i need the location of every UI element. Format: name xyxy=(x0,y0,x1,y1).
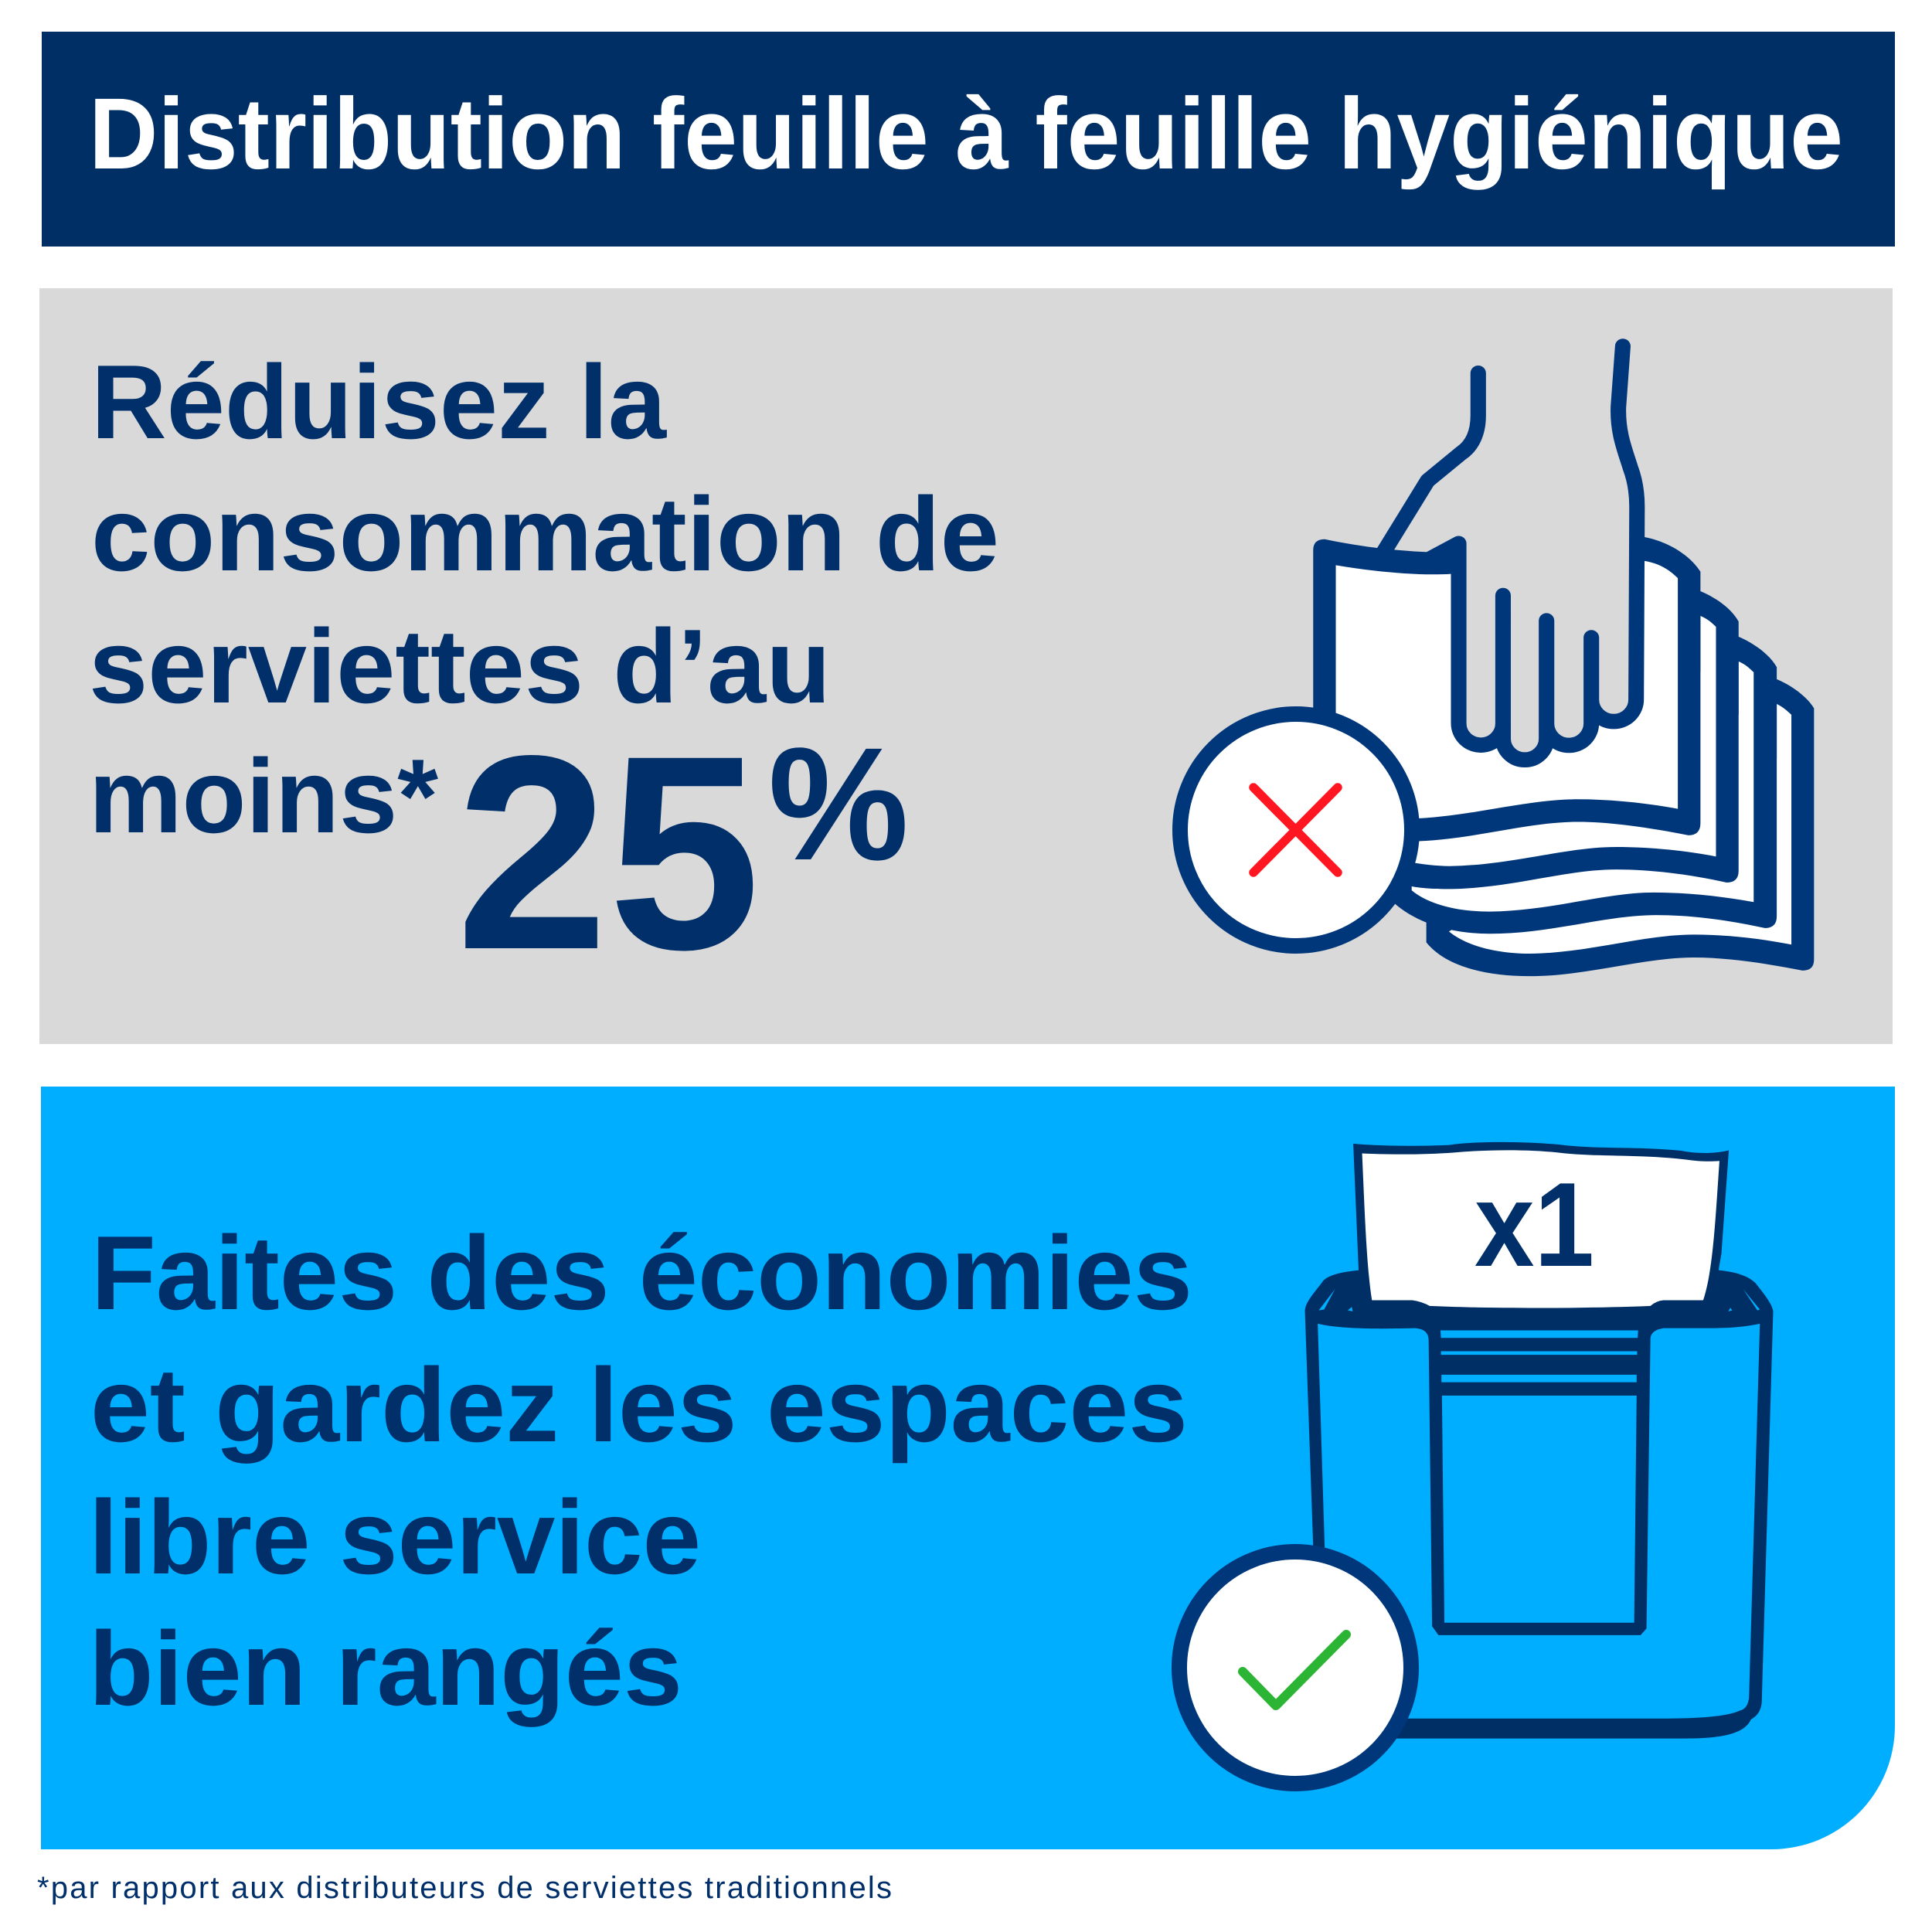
heading: savings: libre service xyxy=(89,1478,701,1596)
sheet 1 xyxy=(1313,537,1700,842)
sheet 3 xyxy=(1394,637,1777,934)
panel: reduce consumption xyxy=(39,288,1893,1044)
heading: reduce consumption: consommation de xyxy=(91,475,999,593)
figure: 25 percent: % xyxy=(768,715,909,894)
sheet 4 xyxy=(1427,679,1814,976)
heading: savings xyxy=(89,1214,1192,1727)
heading: reduce consumption: moins* xyxy=(89,737,438,855)
figure: 25 percent xyxy=(456,698,909,1007)
dispenser body xyxy=(1305,1270,1773,1739)
paper sheet xyxy=(1353,1142,1729,1308)
panel: savings and tidy spaces xyxy=(41,1087,1895,1849)
footnote: *par rapport aux distributeurs de serviettes traditionnels xyxy=(37,1871,892,1905)
icon: dispenser with one sheet xyxy=(1305,1142,1773,1739)
title: Distribution feuille à feuille hygiénique xyxy=(89,77,1843,190)
heading: savings: et gardez les espaces xyxy=(90,1346,1188,1464)
sheet 2 xyxy=(1406,591,1739,889)
figure: 25 percent: 25 xyxy=(456,698,760,1007)
icon: hand pulling paper sheets xyxy=(1313,346,1814,976)
heading: reduce consumption xyxy=(89,343,999,855)
heading: reduce consumption: serviettes d’au xyxy=(89,607,831,725)
hand xyxy=(1379,346,1637,760)
heading: savings: Faites des économies xyxy=(91,1214,1192,1332)
badge: green check xyxy=(1179,1552,1411,1784)
heading: savings: bien rangés xyxy=(89,1610,682,1727)
heading: reduce consumption: Réduisez la xyxy=(91,343,667,461)
badge: red cross xyxy=(1180,714,1412,946)
label: x1: x1 xyxy=(1475,1158,1594,1291)
header banner xyxy=(42,32,1895,247)
